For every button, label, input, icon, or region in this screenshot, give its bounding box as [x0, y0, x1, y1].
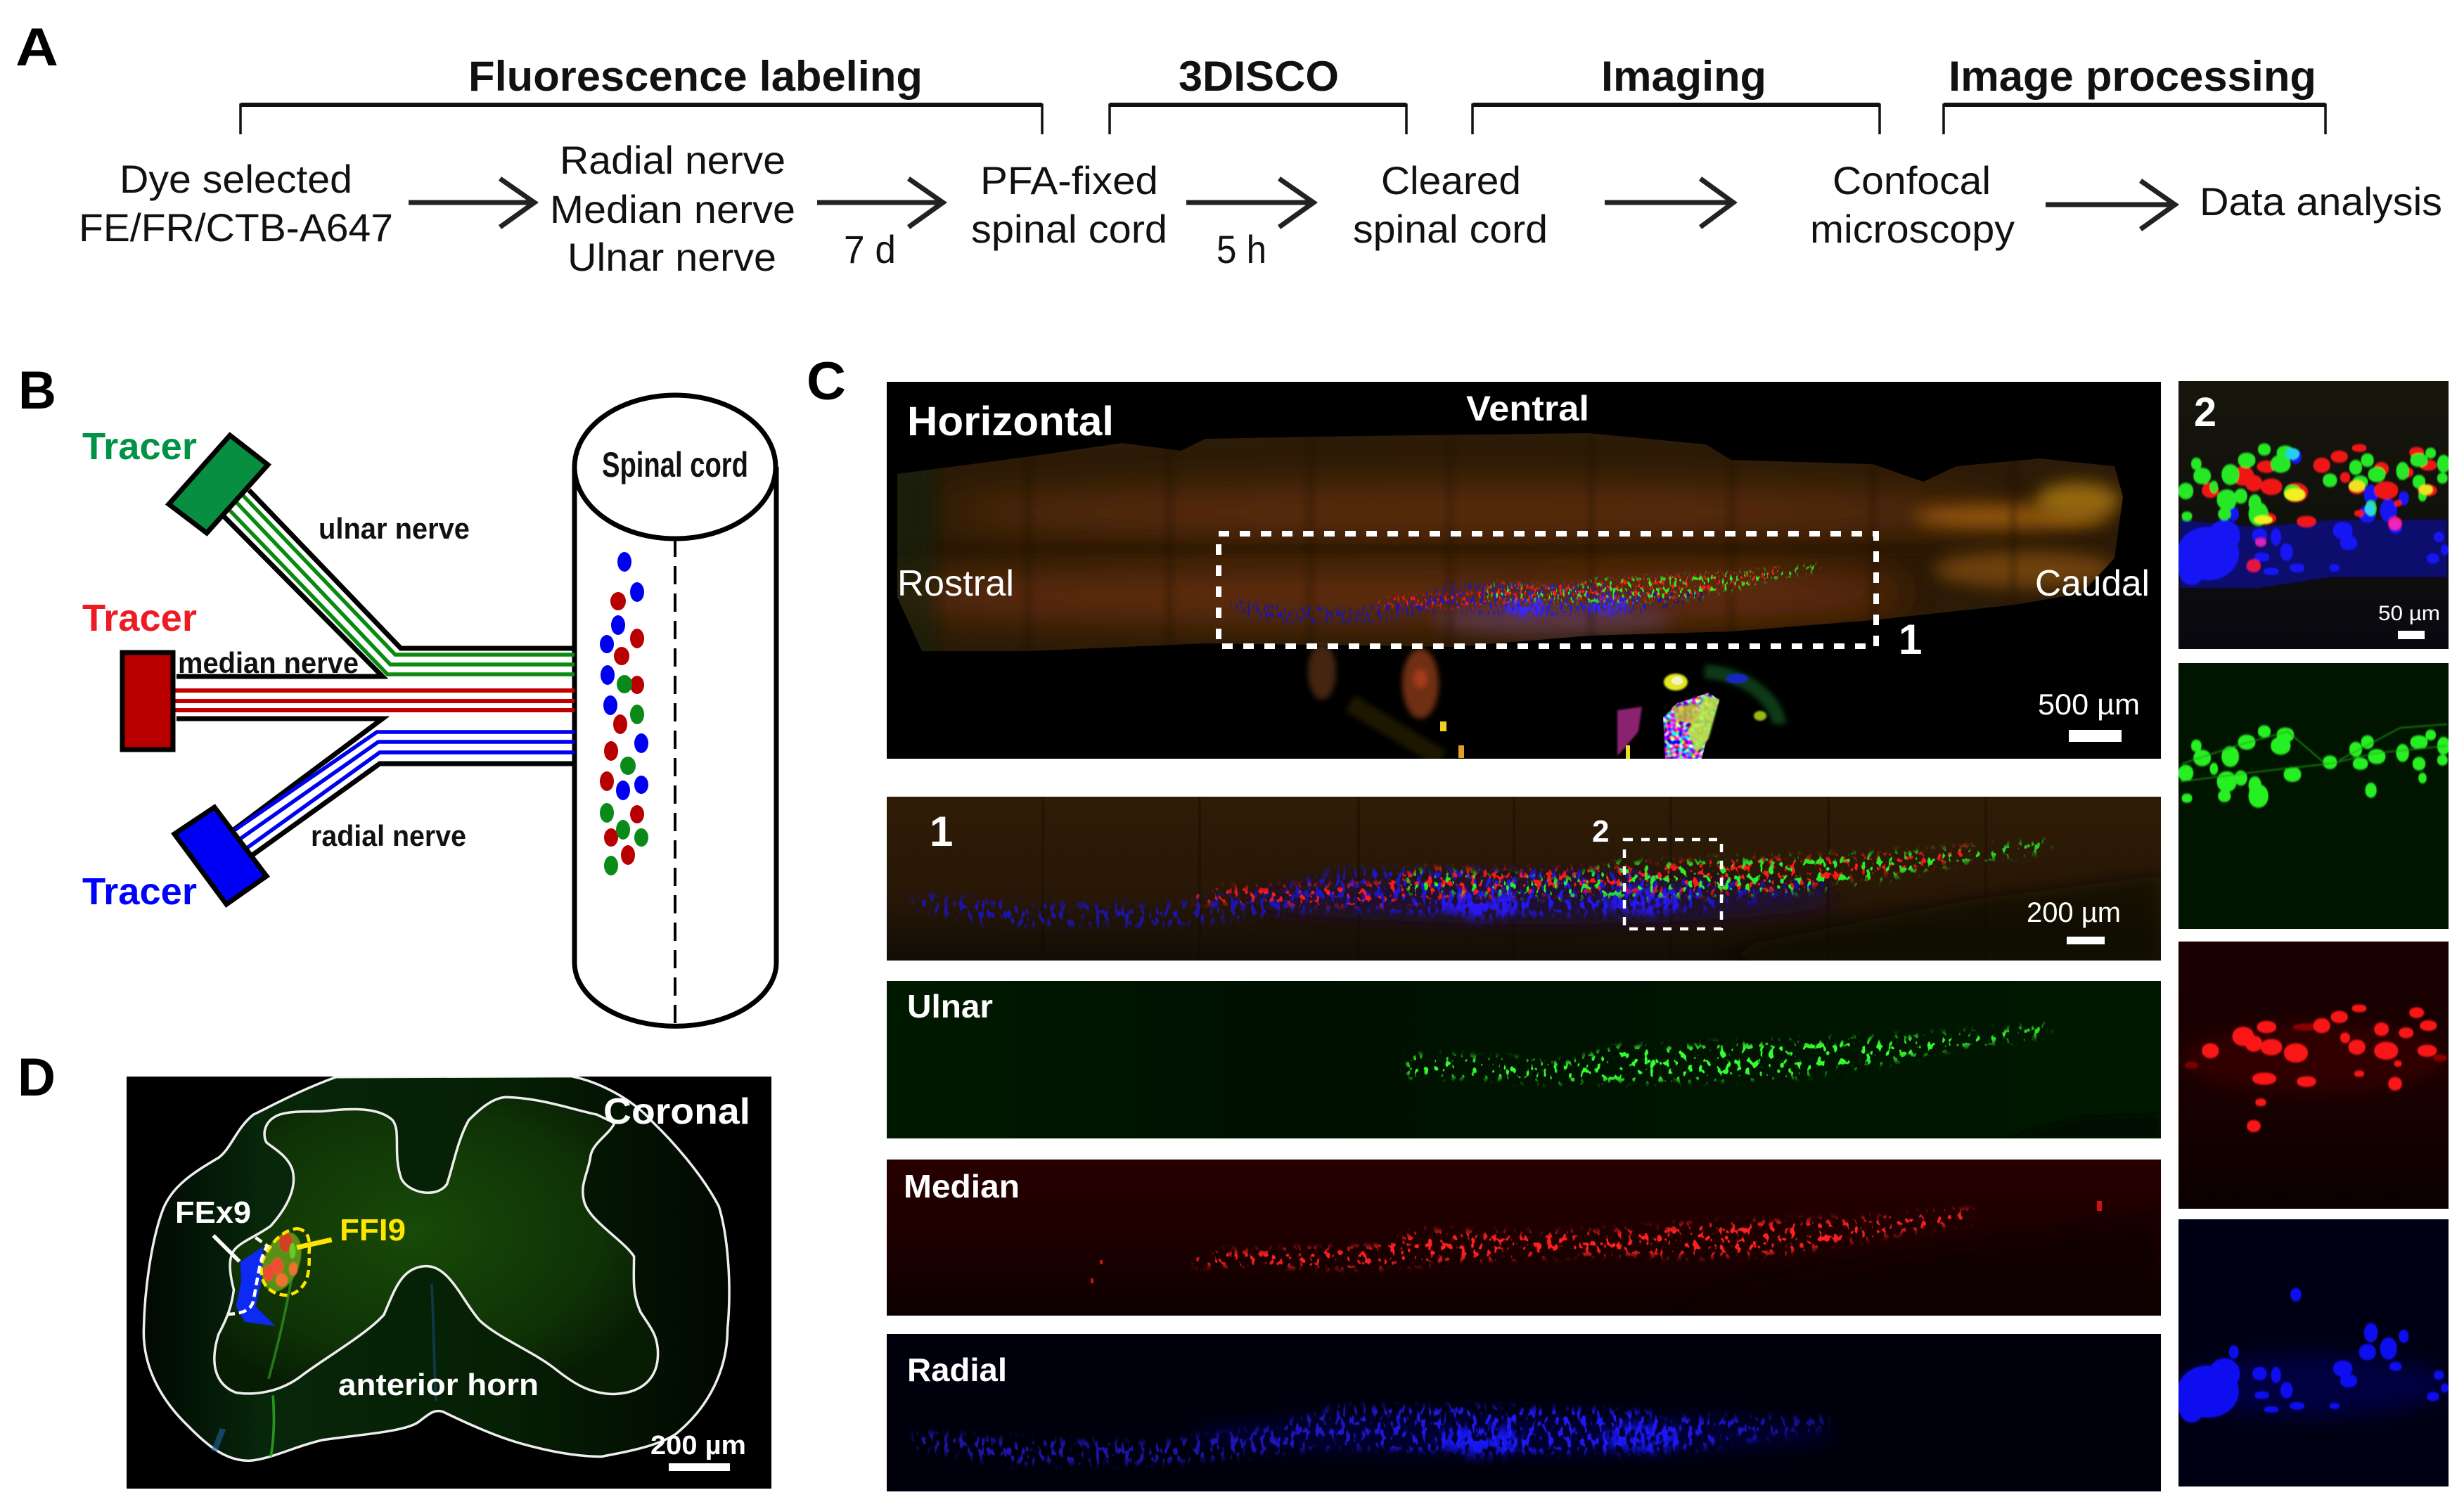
panel D: coronal section	[18, 1048, 771, 1489]
tracer box red	[122, 653, 173, 750]
dashed ROI 2	[1624, 840, 1721, 929]
labelled neurons in cord	[600, 552, 648, 875]
debris below the cord	[1308, 643, 1779, 759]
heading: Imaging: Imaging	[1601, 53, 1766, 100]
radial fibres	[234, 732, 575, 848]
heading: Image processing: Image processing	[1949, 53, 2316, 100]
label: Spinal cord: Spinal cord	[602, 445, 748, 484]
step: dye selected: FE/FR/CTB-A647	[79, 205, 393, 250]
arrow 5	[2046, 181, 2175, 229]
yellow dashed ROI	[261, 1228, 309, 1295]
arrow 2	[817, 179, 943, 227]
image: ROI 1 merged	[887, 797, 2161, 961]
tracer box blue	[174, 807, 267, 904]
image: Ulnar channel	[887, 981, 2161, 1138]
spinal cord tissue	[897, 433, 2123, 651]
label: anterior horn: anterior horn	[338, 1368, 539, 1402]
ulnar fibres	[229, 494, 575, 674]
neuron streak	[1232, 564, 1818, 623]
arrow 1	[409, 179, 534, 227]
label: Tracer blue: Tracer	[82, 871, 197, 913]
tracer box green	[169, 435, 268, 533]
label: Median: Median	[904, 1168, 1020, 1205]
blue FEx9 cluster	[236, 1247, 275, 1326]
panel C: horizontal sections	[807, 352, 2161, 1491]
panel C2: high magnification column	[2178, 381, 2449, 1486]
label: radial nerve: radial nerve	[311, 819, 466, 852]
nerve outlines	[177, 490, 575, 855]
cylinder: spinal cord	[575, 395, 776, 1026]
green cells merged	[1406, 841, 2048, 899]
panel letter D: D	[18, 1048, 56, 1107]
label: 1: 1	[1899, 616, 1922, 663]
fibres	[214, 1240, 436, 1456]
label: 1: 1	[930, 808, 953, 855]
label: 5 h: 5 h	[1217, 227, 1266, 271]
step: cleared spinal cord: spinal cord	[1353, 207, 1548, 251]
image: Radial channel	[887, 1334, 2161, 1491]
scale bar 200 µm	[2027, 897, 2121, 944]
step: PFA-fixed spinal cord	[971, 158, 1167, 251]
label: 2: 2	[1592, 814, 1609, 849]
brackets	[240, 105, 2325, 134]
median fibres	[174, 691, 575, 710]
red cells merged	[1195, 847, 1973, 906]
label: Coronal: Coronal	[603, 1091, 750, 1132]
step: dye selected	[79, 157, 393, 250]
bright blue cores merged	[1438, 888, 1681, 917]
step: cleared spinal cord	[1353, 158, 1548, 251]
step: data analysis: Data analysis	[2200, 179, 2442, 224]
step: nerves	[550, 138, 795, 279]
label: Rostral: Rostral	[897, 563, 1014, 604]
image: Median channel	[887, 1160, 2161, 1316]
scale bar 500 µm	[2038, 688, 2140, 742]
dashed ROI 1	[1219, 534, 1876, 646]
label: 2: 2	[2194, 390, 2216, 435]
step: PFA-fixed spinal cord: spinal cord	[971, 207, 1167, 251]
label: FEx9: FEx9	[175, 1195, 251, 1230]
image: ROI 2 merged	[2178, 381, 2449, 649]
scale bar 200 µm: 200 µm	[2027, 897, 2121, 928]
panel letter C: C	[807, 352, 846, 411]
scale bar 50 µm	[2378, 602, 2440, 639]
FEx9 pointer	[213, 1235, 240, 1261]
arrow 3	[1186, 179, 1314, 227]
image: coronal section	[127, 1077, 771, 1489]
image: ROI 2 blue	[2178, 1219, 2449, 1486]
heading: 3DISCO: 3DISCO	[1179, 53, 1339, 100]
panel A: workflow	[15, 18, 2442, 279]
step: confocal microscopy	[1810, 158, 2015, 251]
label: Tracer green: Tracer	[82, 425, 197, 468]
label: 7 d: 7 d	[844, 227, 896, 271]
step: nerves: Median nerve	[550, 187, 795, 231]
heading: Fluorescence labeling: Fluorescence labeling	[468, 53, 923, 100]
label: ulnar nerve: ulnar nerve	[319, 512, 470, 545]
step: nerves: Ulnar nerve	[567, 235, 776, 279]
panel B: tracer schematic	[18, 361, 776, 1026]
label: Ulnar: Ulnar	[907, 988, 993, 1025]
FFI9 cluster	[255, 1231, 308, 1294]
label: Ventral: Ventral	[1466, 389, 1589, 428]
label: Tracer red: Tracer	[82, 597, 197, 639]
image: whole horizontal section	[837, 382, 2161, 759]
step: confocal microscopy: microscopy	[1810, 207, 2015, 251]
label: median nerve: median nerve	[178, 646, 359, 679]
scale bar 200 µm: 200 µm	[650, 1431, 746, 1460]
white dashed ROI	[228, 1238, 267, 1314]
label: Horizontal: Horizontal	[907, 399, 1114, 444]
label: Caudal: Caudal	[2035, 563, 2150, 604]
scale bar 50 µm: 50 µm	[2378, 602, 2440, 625]
step: nerves: Radial nerve	[560, 138, 785, 182]
label: FFI9: FFI9	[340, 1213, 406, 1247]
panel letter B: B	[18, 361, 56, 420]
arrow 4	[1605, 179, 1733, 227]
step: PFA-fixed spinal cord: PFA-fixed	[980, 158, 1158, 203]
step: cleared spinal cord: Cleared	[1381, 158, 1521, 203]
outer white matter	[143, 1077, 729, 1460]
step: confocal microscopy: Confocal	[1833, 158, 1991, 203]
label: Radial: Radial	[907, 1351, 1007, 1388]
scale bar 500 µm: 500 µm	[2038, 688, 2140, 721]
image: ROI 2 red	[2179, 942, 2449, 1209]
blue cells merged	[914, 869, 1828, 927]
step: dye selected: Dye selected	[120, 157, 352, 201]
panel letter A: A	[15, 18, 58, 77]
image: ROI 2 green	[2179, 663, 2449, 929]
grey matter butterfly	[214, 1097, 658, 1394]
FFI9 pointer	[297, 1240, 332, 1247]
